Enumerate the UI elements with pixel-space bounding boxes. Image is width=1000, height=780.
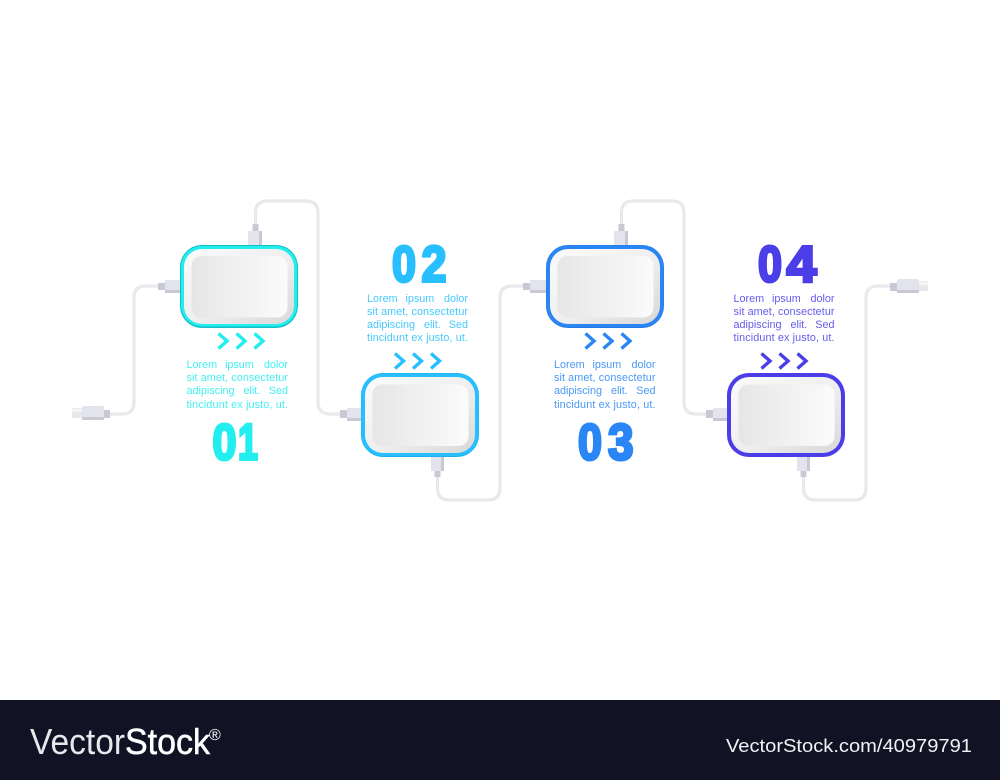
text block: step 4: Sed — [815, 319, 834, 331]
footer logo: Stock — [125, 721, 211, 762]
panel: step 4 card — [727, 373, 845, 457]
text block: step 2: adipiscing — [367, 319, 415, 331]
icon: connector card 1 top — [248, 224, 262, 246]
text block: step 3: tincidunt ex justo, ut. — [554, 399, 656, 411]
icon: connector card 2 left — [340, 408, 362, 421]
icon: connector card 4 left — [706, 408, 728, 421]
text block: step 2: sit amet, consectetur — [367, 306, 468, 318]
cable: card 4 to right lightning — [804, 286, 890, 500]
text block: step 4: dolor — [810, 293, 835, 305]
cable: card 2 to card 3 — [438, 286, 523, 500]
arrows: step 2 chevrons — [395, 354, 440, 368]
text block: step 3: Lorem — [554, 359, 585, 371]
text block: step 3: elit. — [611, 385, 628, 397]
text block: step 3: dolor — [631, 359, 656, 371]
text block: step 1: tincidunt ex justo, ut. — [186, 399, 288, 411]
panel: step 3 card — [546, 245, 664, 328]
footer logo: Vector — [30, 721, 125, 762]
number: 04: 0 — [758, 236, 782, 292]
footer image id: VectorStock.com/40979791 — [726, 735, 972, 756]
text block: step 1: Sed — [269, 385, 288, 397]
cable: card 1 to card 2 — [256, 201, 340, 414]
text block: step 4 — [734, 293, 835, 344]
text block: step 2: ipsum — [406, 293, 434, 305]
number: 04 — [758, 236, 817, 292]
number: 03: 0 — [578, 414, 602, 470]
number: 03 — [578, 414, 634, 470]
icon: connector card 4 bottom — [797, 456, 810, 477]
text block: step 1: adipiscing — [186, 385, 235, 397]
text block: step 3: adipiscing — [554, 385, 602, 397]
text block: step 1: elit. — [244, 385, 260, 397]
panel: step 1 card — [180, 245, 298, 328]
cable: card 3 to card 4 — [622, 201, 706, 414]
arrows: step 1 chevrons — [218, 334, 263, 348]
text block: step 3: sit amet, consectetur — [554, 372, 656, 384]
footer bar — [0, 700, 1000, 780]
number: 01 — [212, 414, 258, 470]
text block: step 2: Sed — [449, 319, 468, 331]
icon: right lightning connector — [890, 279, 928, 293]
text block: step 4: Lorem — [734, 293, 764, 305]
text block: step 1: ipsum — [225, 359, 254, 371]
icon: connector card 1 left — [158, 280, 181, 293]
text block: step 4: adipiscing — [734, 319, 782, 331]
icon: connector card 3 top — [614, 224, 628, 246]
text block: step 4: ipsum — [772, 293, 801, 305]
number: 04: 4 — [786, 236, 817, 292]
text block: step 4: sit amet, consectetur — [734, 306, 835, 318]
icon: connector card 2 bottom — [431, 456, 444, 477]
text block: step 1 — [186, 359, 288, 411]
number: 01: 1 — [238, 414, 258, 470]
icon: left lightning connector — [72, 406, 110, 420]
arrows: step 4 chevrons — [762, 354, 806, 368]
text block: step 2: Lorem — [367, 293, 398, 305]
icon: connector card 3 left — [523, 280, 547, 293]
arrows: step 3 chevrons — [586, 334, 630, 348]
text block: step 3: ipsum — [592, 359, 621, 371]
panel: step 2 card — [361, 373, 479, 457]
text block: step 4: elit. — [790, 319, 807, 331]
footer logo: ® — [209, 727, 221, 744]
text block: step 2: dolor — [444, 293, 468, 305]
text block: step 4: tincidunt ex justo, ut. — [734, 332, 834, 344]
text block: step 2: elit. — [424, 319, 441, 331]
number: 01: 0 — [212, 414, 236, 470]
text block: step 3: Sed — [636, 385, 656, 397]
footer logo — [30, 721, 221, 762]
number: 02: 0 — [392, 236, 416, 292]
text block: step 3 — [554, 359, 656, 411]
number: 02: 2 — [422, 236, 446, 292]
text block: step 2 — [367, 293, 468, 344]
text block: step 1: sit amet, consectetur — [186, 372, 288, 384]
text block: step 1: dolor — [264, 359, 288, 371]
text block: step 2: tincidunt ex justo, ut. — [367, 332, 468, 344]
number: 03: 3 — [608, 414, 634, 470]
text block: step 1: Lorem — [186, 359, 217, 371]
cable: left lightning to card 1 — [110, 286, 158, 414]
number: 02 — [392, 236, 446, 292]
